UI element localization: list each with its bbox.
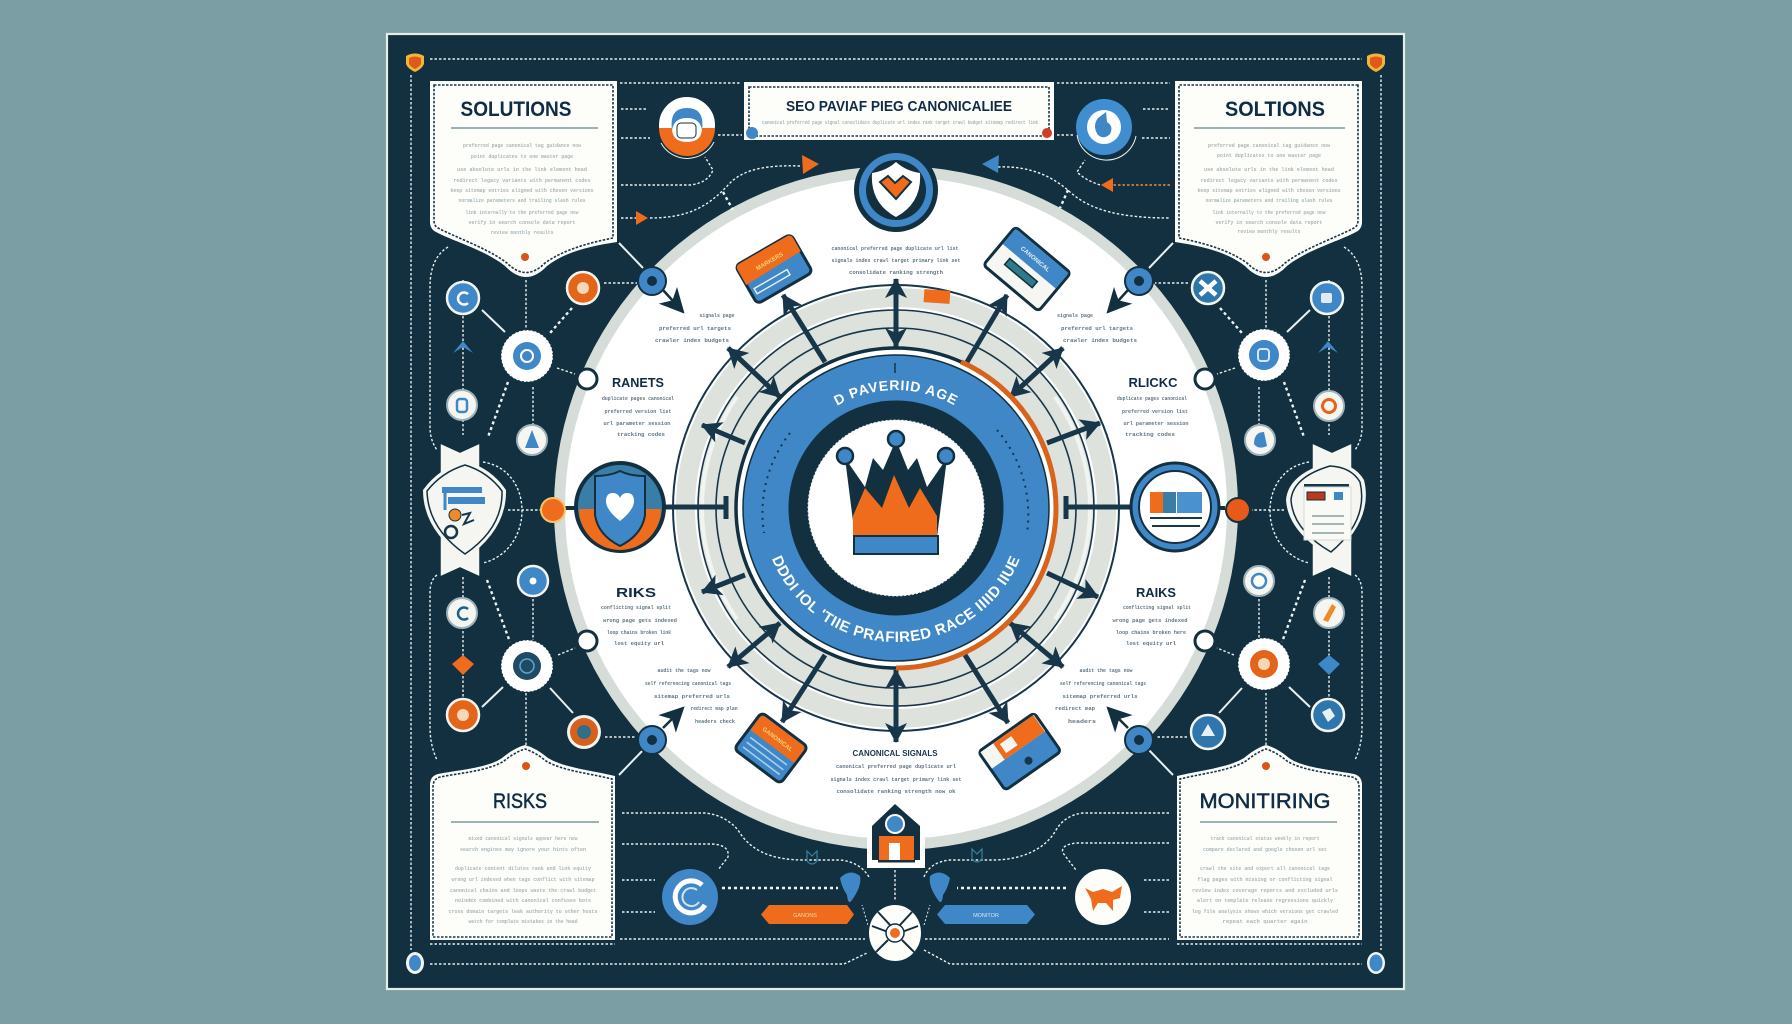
text block: top centre bbox=[832, 245, 960, 276]
tag: orange: GANONS bbox=[793, 913, 817, 919]
text block: RANETS: tracking codes bbox=[617, 431, 665, 438]
text block: RIKS left: lost equity url bbox=[614, 640, 665, 647]
icon: spider bbox=[862, 904, 930, 962]
text block: top centre: canonical preferred page duplicate url list bbox=[832, 245, 958, 252]
text block: bottom centre: CANONICAL SIGNALS bbox=[852, 748, 938, 758]
text block: RANETS: preferred version list bbox=[604, 408, 672, 415]
text block: RIKS left: wrong page gets indexed bbox=[603, 617, 677, 624]
body text: preferred page canonical tag guidance now bbox=[463, 142, 582, 149]
body text: watch for template mistakes in the head bbox=[468, 918, 578, 925]
title box: canonical preferred page signal consolidate duplicate url index rank target crawl budget sitemap redirect link bbox=[762, 119, 1039, 126]
body text: log file analysis shows which versions get crawled bbox=[1192, 908, 1338, 915]
body text: track canonical status weekly in report bbox=[1210, 835, 1320, 842]
text block: lower right: redirect map bbox=[1055, 705, 1096, 712]
body text: link internally to the preferred page now bbox=[466, 209, 579, 216]
arrows: orange and blue triangles bbox=[636, 155, 1113, 225]
icon: left orange node bbox=[541, 498, 580, 522]
icon: top-right corner badge bbox=[1367, 54, 1385, 72]
icon: left ribbon shield bbox=[423, 443, 506, 577]
body text: point duplicates to one master page bbox=[1217, 152, 1322, 159]
text block: RLICKC: RLICKC bbox=[1128, 375, 1178, 390]
text block: RAIKS right: lost equity url bbox=[1126, 640, 1177, 647]
text block: RAIKS right bbox=[1112, 585, 1191, 647]
body text bbox=[448, 835, 598, 925]
icon: top left circle bbox=[658, 96, 716, 158]
body text: redirect legacy variants with permanent codes bbox=[454, 177, 590, 184]
card: top-left: MARKERS bbox=[755, 252, 785, 272]
icon: right orange node bbox=[1215, 498, 1250, 522]
text block: RLICKC bbox=[1117, 375, 1188, 438]
body text: repeat each quarter again bbox=[1222, 918, 1308, 925]
text block: RLICKC: duplicate pages canonical bbox=[1117, 395, 1188, 402]
body text: wrong url indexed when tags conflict with sitemap bbox=[452, 876, 595, 883]
body text: mixed canonical signals appear here now bbox=[468, 835, 578, 842]
card: bottom-left bbox=[734, 712, 808, 784]
icon: right ribbon shield with document bbox=[1286, 443, 1366, 577]
chart: concentric rings bbox=[673, 285, 1119, 731]
icon: top-left corner badge bbox=[406, 54, 424, 72]
body text: normalize parameters and trailing slash rules bbox=[1206, 197, 1332, 204]
tag: blue bbox=[937, 905, 1035, 924]
text block: RLICKC: url parameter session bbox=[1124, 420, 1188, 427]
tag: blue: MONITOR bbox=[973, 913, 999, 919]
body text: use absolute urls in the link element head bbox=[1204, 166, 1334, 173]
dashed frame lines bbox=[411, 59, 1381, 964]
text block: RAIKS right: wrong page gets indexed bbox=[1112, 617, 1188, 624]
body text: redirect legacy variants with permanent codes bbox=[1200, 177, 1338, 184]
heading: SOLUTIONS bbox=[460, 98, 572, 121]
text block: lower right: sitemap preferred urls bbox=[1062, 693, 1138, 700]
text block: top centre: consolidate ranking strength bbox=[849, 269, 943, 276]
body text: search engines may ignore your hints often bbox=[460, 846, 586, 853]
icon: large document circle bbox=[1131, 463, 1219, 551]
text block: RLICKC: preferred version list bbox=[1122, 408, 1188, 415]
connectors: top dashed paths bbox=[620, 83, 1170, 218]
text block: lower left: sitemap preferred urls bbox=[654, 693, 730, 700]
central white disc bbox=[554, 166, 1238, 850]
icon: blue C circle bbox=[662, 869, 718, 925]
radial spoke arrows bbox=[664, 279, 1130, 742]
text block: lower left bbox=[645, 667, 738, 725]
text block: lower left: headers check bbox=[695, 718, 736, 725]
heading: RISKS bbox=[493, 790, 547, 813]
blue centre ring with curved text: D PAVERIID AGE bbox=[833, 380, 958, 406]
panel: dark poster frame bbox=[387, 34, 1404, 989]
icon: crown bbox=[837, 431, 954, 554]
icon: top right circle bbox=[1076, 99, 1136, 160]
text block: bottom centre: consolidate ranking strength now ok bbox=[836, 788, 956, 795]
body text: review monthly results bbox=[1238, 228, 1300, 235]
icon: bottom-left corner badge bbox=[406, 952, 424, 974]
text block: RIKS left: RIKS bbox=[616, 585, 656, 600]
text block: upper left: signals page bbox=[700, 312, 735, 319]
card: bottom-left: GANONICAL bbox=[761, 727, 794, 754]
panel: RISKS bottom left bbox=[430, 745, 615, 940]
hub arrows toward circle bbox=[663, 290, 1128, 728]
text block: lower right bbox=[1055, 667, 1146, 725]
title box bbox=[744, 82, 1054, 140]
body text: use absolute urls in the link element head bbox=[457, 166, 587, 173]
body text: canonical chains and loops waste the crawl budget bbox=[450, 887, 596, 894]
text block: bottom centre: canonical preferred page duplicate url bbox=[836, 763, 957, 770]
text block: upper left: crawler index budgets bbox=[655, 337, 729, 344]
heading: SOLTIONS bbox=[1225, 98, 1325, 121]
body text: crawl the site and export all canonical tags bbox=[1200, 865, 1330, 872]
body text: flag pages with missing or conflicting signal bbox=[1198, 876, 1333, 883]
body text: review index coverage reports and excluded urls bbox=[1192, 887, 1338, 894]
body text: review monthly results bbox=[490, 229, 554, 236]
text block: lower left: redirect map plan bbox=[690, 705, 738, 712]
panel: SOLTIONS top right bbox=[1175, 81, 1362, 277]
tag: orange bbox=[761, 905, 854, 924]
text block: RAIKS right: loop chains broken here bbox=[1116, 629, 1187, 636]
body text: alert on template release regressions quickly bbox=[1197, 897, 1334, 904]
body text: compare declared and google chosen url set bbox=[1203, 846, 1327, 853]
card: top-right bbox=[983, 227, 1071, 311]
icon: bottom house badge bbox=[867, 797, 925, 868]
body text bbox=[1192, 835, 1338, 925]
body text: keep sitemap entries aligned with chosen versions bbox=[1198, 187, 1340, 194]
text block: lower right: headers bbox=[1068, 718, 1096, 725]
card: top-left bbox=[735, 234, 813, 304]
icons: blue droplets bbox=[840, 872, 950, 902]
icon: large shield heart circle bbox=[576, 463, 664, 551]
text block: bottom centre: signals index crawl target primary link set bbox=[830, 776, 962, 783]
body text: verify in search console data report bbox=[1216, 219, 1322, 226]
body text: verify in search console data report bbox=[468, 219, 576, 226]
body text bbox=[450, 142, 594, 236]
icon: bottom-right corner badge bbox=[1367, 952, 1385, 974]
connectors: right side network bbox=[1147, 243, 1362, 775]
card: bottom-right bbox=[978, 713, 1061, 790]
text block: lower left: audit the tags now bbox=[658, 667, 711, 674]
hub nodes bbox=[638, 267, 1153, 754]
icon: top shield badge bbox=[854, 148, 938, 232]
text block: top centre: signals index crawl target primary link set bbox=[832, 257, 960, 264]
text block: lower right: self referencing canonical tags bbox=[1060, 680, 1146, 687]
blue centre ring with curved text: DDDI IOL 'TIIE PRAFIRED RACE IIIID IIUE bbox=[772, 555, 1020, 642]
body text: point duplicates to one master page bbox=[471, 153, 574, 160]
text block: RANETS: duplicate pages canonical bbox=[602, 395, 675, 402]
text block: lower left: self referencing canonical tags bbox=[645, 680, 731, 687]
icon: white circle with orange shape bbox=[1075, 869, 1131, 925]
text block: RANETS: RANETS bbox=[612, 375, 664, 390]
connectors: bottom dashed paths bbox=[622, 813, 1169, 912]
body text: noindex combined with canonical confuses bots bbox=[455, 897, 591, 904]
text block: upper right bbox=[1057, 312, 1137, 344]
heading: MONITIRING bbox=[1200, 790, 1330, 813]
text block: RAIKS right: RAIKS bbox=[1136, 585, 1176, 600]
text block: upper right: crawler index budgets bbox=[1063, 337, 1137, 344]
body text: duplicate content dilutes rank and link equity bbox=[455, 865, 592, 872]
body text bbox=[1198, 142, 1340, 235]
connectors: left side network bbox=[430, 243, 645, 775]
text block: RANETS: url parameter session bbox=[604, 420, 670, 427]
icons: right side nodes bbox=[1191, 272, 1344, 749]
text block: RAIKS right: conflicting signal split bbox=[1123, 604, 1191, 611]
body text: normalize parameters and trailing slash rules bbox=[458, 197, 586, 204]
body text: keep sitemap entries aligned with chosen versions bbox=[450, 187, 594, 194]
text block: upper right: preferred url targets bbox=[1061, 325, 1133, 332]
title box: SEO PAVIAF PIEG CANONICALIEE bbox=[786, 98, 1012, 115]
text block: RIKS left: loop chains broken link bbox=[607, 629, 672, 636]
icons: left side nodes bbox=[447, 272, 601, 749]
text block: RLICKC: tracking codes bbox=[1125, 431, 1175, 438]
text block: RANETS bbox=[602, 375, 675, 438]
card: top-right: CANONICAL bbox=[1019, 246, 1051, 274]
body text: preferred page canonical tag guidance now bbox=[1208, 142, 1331, 149]
panel: MONITIRING bottom right bbox=[1177, 745, 1362, 940]
text block: RIKS left bbox=[601, 585, 677, 647]
panel: SOLUTIONS top left bbox=[430, 81, 617, 277]
text block: bottom centre bbox=[830, 748, 962, 795]
text block: lower right: audit the tags now bbox=[1080, 667, 1133, 674]
text block: upper left: preferred url targets bbox=[659, 325, 731, 332]
body text: cross domain targets leak authority to other hosts bbox=[448, 908, 598, 915]
text block: upper left bbox=[655, 312, 735, 344]
text block: upper right: signals page bbox=[1057, 312, 1094, 319]
blue centre ring with curved text bbox=[734, 346, 1058, 670]
text block: RIKS left: conflicting signal split bbox=[601, 604, 671, 611]
body text: link internally to the preferred page now bbox=[1212, 209, 1326, 216]
